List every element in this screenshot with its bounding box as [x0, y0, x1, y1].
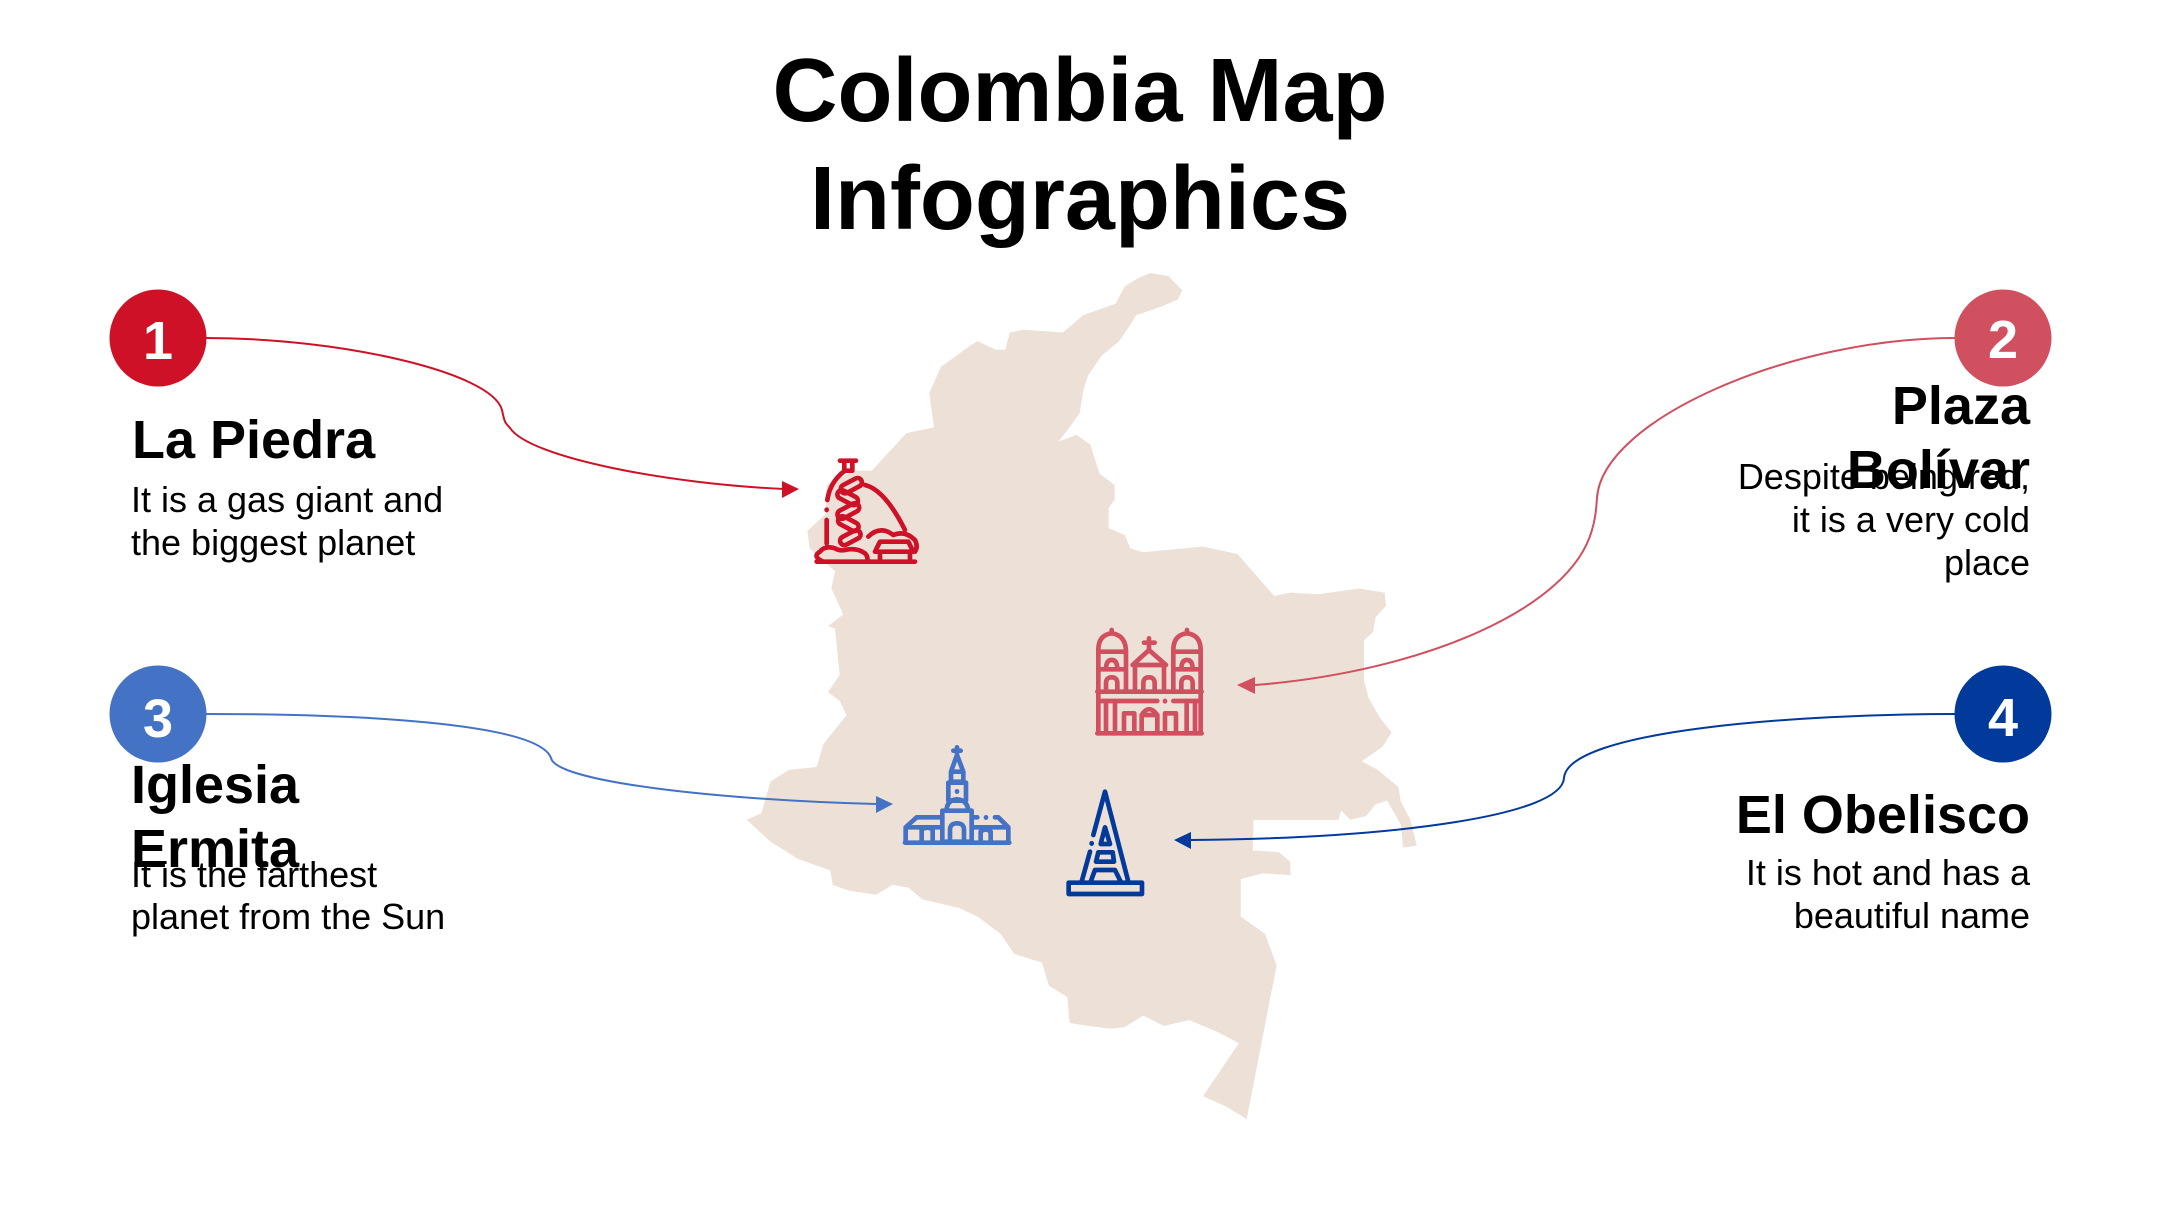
panel: Plaza Bolivar	[1738, 290, 2052, 583]
text: Plaza Bolivar description: Despite being red,	[1738, 456, 2030, 497]
heading: Plaza Bolivar: Bolívar	[1847, 440, 2030, 500]
heading: Iglesia Ermita: Ermita	[131, 819, 300, 879]
text: Plaza Bolivar description: it is a very cold	[1792, 499, 2030, 540]
arrow: 3 to Iglesia Ermita	[206, 714, 893, 813]
heading: Iglesia Ermita: Iglesia	[131, 755, 300, 815]
heading: Plaza Bolivar: Plaza	[1892, 376, 2031, 436]
text: Iglesia Ermita description: It is the farthest	[131, 854, 377, 895]
icon: Plaza Bolivar cathedral	[1097, 630, 1202, 733]
arrow: 4 to El Obelisco	[1174, 714, 1955, 849]
badge 4: 4	[1988, 688, 2018, 748]
icon: El Obelisco	[1069, 792, 1142, 894]
panel: El Obelisco	[1736, 666, 2052, 936]
arrow: 2 to Plaza Bolivar	[1237, 338, 1955, 694]
title: Colombia Map	[772, 41, 1388, 141]
text: El Obelisco description: beautiful name	[1794, 895, 2030, 936]
badge 3	[110, 666, 206, 762]
panel: Iglesia Ermita	[110, 666, 445, 937]
icon: La Piedra rock	[817, 461, 917, 562]
text: El Obelisco description: It is hot and has a	[1746, 852, 2031, 893]
map of Colombia	[747, 273, 1417, 1119]
badge 1: 1	[143, 311, 173, 371]
icon: Iglesia Ermita church	[905, 747, 1009, 843]
heading: El Obelisco: El Obelisco	[1736, 785, 2030, 845]
badge 2: 2	[1988, 310, 2018, 370]
text: La Piedra description: the biggest planet	[131, 522, 415, 563]
heading: La Piedra: La Piedra	[132, 410, 376, 470]
panel: La Piedra	[110, 290, 443, 563]
arrow: 1 to La Piedra	[206, 338, 799, 498]
text: Plaza Bolivar description: place	[1944, 542, 2030, 583]
badge 3: 3	[143, 689, 173, 749]
badge 1	[110, 290, 206, 386]
text: La Piedra description: It is a gas giant and	[131, 479, 443, 520]
title: Infographics	[810, 149, 1350, 249]
badge 4	[1954, 666, 2052, 762]
badge 2	[1954, 290, 2052, 386]
text: Iglesia Ermita description: planet from the Sun	[131, 896, 445, 937]
